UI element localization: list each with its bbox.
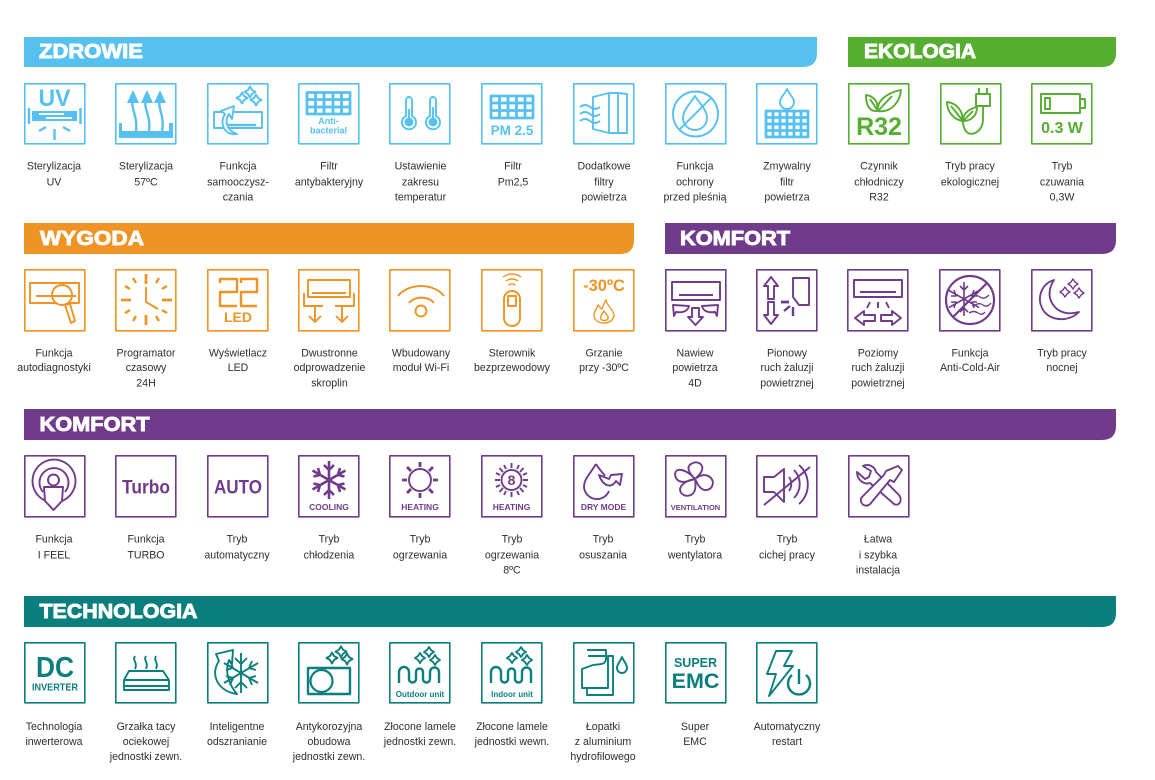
- item: Ochrona przed plesnia: [663, 84, 727, 204]
- label: moduł Wi-Fi: [393, 362, 449, 374]
- item: Czuwanie: [1032, 84, 1092, 204]
- label: filtry: [594, 176, 614, 188]
- heading: EKOLOGIA: [848, 37, 1116, 67]
- icon: Outdoor unit: Outdoor unit: [396, 690, 445, 699]
- label: Sterownik: [489, 348, 536, 360]
- item: Pionowy ruch: [757, 270, 817, 390]
- label: jednostki wewn.: [474, 736, 549, 748]
- item: Anti-Cold-Air: [940, 270, 1000, 374]
- item: Tryb ekologiczny: [941, 84, 1001, 188]
- item: Lopatki: [570, 643, 636, 763]
- label: Tryb: [227, 534, 248, 546]
- label: Tryb: [502, 534, 523, 546]
- label: Tryb pracy: [945, 160, 996, 172]
- label: bezprzewodowy: [474, 362, 551, 374]
- label: osuszania: [579, 550, 627, 562]
- icon: VENTILATION fan: VENTILATION: [671, 503, 720, 512]
- label: chłodniczy: [854, 176, 904, 188]
- label: Wbudowany: [392, 348, 451, 360]
- label: czasowy: [126, 362, 167, 374]
- icon: remote: [482, 270, 542, 331]
- label: Funkcja: [676, 160, 714, 172]
- icon: eco plug: [941, 84, 1001, 144]
- icon: diagnostics: [25, 270, 85, 331]
- label: Tryb: [319, 534, 340, 546]
- heading: TECHNOLOGIA: TECHNOLOGIA: [40, 601, 198, 623]
- label: z aluminium: [575, 736, 631, 748]
- label: Ustawienie: [395, 160, 447, 172]
- label: instalacja: [856, 564, 900, 576]
- label: Funkcja: [35, 534, 73, 546]
- label: Programator: [117, 348, 176, 360]
- icon: HEATING: HEATING: [401, 502, 439, 512]
- icon: smart defrost: [208, 643, 268, 703]
- label: EMC: [683, 736, 707, 748]
- icon: Turbo: Turbo: [122, 476, 170, 498]
- label: Zmywalny: [763, 160, 812, 172]
- label: Sterylizacja: [119, 160, 173, 172]
- icon: LED 22: LED: [224, 309, 252, 325]
- label: chłodzenia: [304, 550, 354, 562]
- label: Tryb: [777, 534, 798, 546]
- section: KOMFORT wide: [24, 409, 1116, 576]
- item: Filtr antybakteryjny: [295, 84, 364, 188]
- label: ruch żaluzji: [852, 362, 904, 374]
- label: I FEEL: [38, 550, 70, 562]
- icon: self cleaning: [208, 84, 268, 144]
- label: Złocone lamele: [384, 721, 456, 733]
- label: Funkcja: [951, 348, 989, 360]
- label: jednostki zewn.: [292, 751, 365, 763]
- label: UV: [47, 176, 62, 188]
- label: automatyczny: [204, 550, 270, 562]
- section: TECHNOLOGIA: [24, 596, 1116, 763]
- label: i szybka: [859, 550, 897, 562]
- item: Samooczyszczanie: [207, 84, 269, 204]
- label: przy -30ºC: [579, 362, 629, 374]
- icon: DRY MODE: DRY MODE: [581, 502, 626, 512]
- icon: UV: UV: [38, 85, 70, 112]
- icon: R32 leaves: R32: [856, 113, 902, 141]
- icon: wifi: [390, 270, 450, 331]
- heading: KOMFORT: [24, 409, 1116, 440]
- label: powietrznej: [851, 378, 905, 390]
- icon: vertical louver: [757, 270, 817, 331]
- label: Sterylizacja: [27, 160, 81, 172]
- icon: HEATING 8: [482, 456, 542, 517]
- label: Wyświetlacz: [209, 348, 267, 360]
- label: Złocone lamele: [476, 721, 548, 733]
- icon: DC INVERTER: [25, 643, 85, 703]
- item: LED: [208, 270, 268, 374]
- item: R32: [849, 84, 909, 204]
- label: 0,3W: [1050, 192, 1074, 204]
- label: przed pleśnią: [663, 192, 727, 204]
- item: Ustawienie zakresu temperatur: [390, 84, 450, 204]
- icon: Indoor unit: Indoor unit: [491, 690, 533, 699]
- icon: condensate drain: [299, 270, 359, 331]
- label: inwerterowa: [25, 736, 83, 748]
- label: Dwustronne: [301, 348, 358, 360]
- item: Cicha praca: [757, 456, 817, 562]
- label: jednostki zewn.: [109, 751, 182, 763]
- icon: I FEEL: [25, 456, 85, 517]
- label: cichej pracy: [759, 550, 816, 562]
- item: Wentylator: [666, 456, 726, 562]
- label: hydrofilowego: [570, 751, 636, 763]
- icon: anti-corrosion casing: [299, 643, 359, 703]
- icon: wrench and screwdriver: [849, 456, 909, 517]
- label: R32: [869, 192, 889, 204]
- item: Wi-Fi: [390, 270, 451, 374]
- icon: battery 0.3 W: 0.3 W: [1041, 120, 1084, 137]
- label: ruch żaluzji: [760, 362, 814, 374]
- label: Czynnik: [860, 160, 899, 172]
- label: ochrony: [676, 176, 715, 188]
- label: Dodatkowe: [578, 160, 631, 172]
- label: jednostki zewn.: [383, 736, 456, 748]
- icon: AUTO: AUTO: [214, 476, 262, 498]
- label: Technologia: [26, 721, 82, 733]
- label: powietrza: [672, 362, 718, 374]
- icon: horizontal louver: [848, 270, 908, 331]
- heading: WYGODA: [24, 223, 634, 254]
- icon: -30C flame: -30ºC: [583, 277, 625, 295]
- item: Auto: [204, 456, 270, 562]
- item: Sterylizacja UV: [25, 84, 85, 188]
- item: Odszranianie: [207, 643, 268, 748]
- item: Nawiew 4D: [666, 270, 726, 390]
- heading: KOMFORT: KOMFORT: [40, 414, 150, 436]
- label: ogrzewania: [393, 550, 447, 562]
- label: restart: [772, 736, 802, 748]
- item: Zlocone lamele wewn: [474, 643, 549, 748]
- heading: ZDROWIE: [24, 37, 817, 67]
- icon: anti-mould: [666, 84, 726, 144]
- label: Grzałka tacy: [117, 721, 176, 733]
- item: Grzalka tacy: [109, 643, 182, 763]
- label: Funkcja: [35, 348, 73, 360]
- icon: antibacterial filter: bacterial: [310, 126, 347, 136]
- label: Funkcja: [127, 534, 165, 546]
- item: Filtr Pm2,5: [482, 84, 542, 188]
- icon: moon: [1032, 270, 1092, 331]
- label: nocnej: [1046, 362, 1078, 374]
- item: Antykorozyjna: [292, 643, 365, 763]
- item: Auto restart: [754, 643, 821, 748]
- item: Dodatkowe filtry: [574, 84, 634, 204]
- label: powietrznej: [760, 378, 814, 390]
- label: Automatyczny: [754, 721, 821, 733]
- icon: HEATING 8: HEATING: [493, 502, 531, 512]
- label: Filtr: [504, 160, 522, 172]
- item: Ogrzewanie 8C: [482, 456, 542, 576]
- label: Tryb: [410, 534, 431, 546]
- label: ogrzewania: [485, 550, 539, 562]
- icon: anti cold air: [940, 270, 1000, 331]
- label: obudowa: [307, 736, 351, 748]
- section: KOMFORT right: [665, 223, 1116, 390]
- section: ZDROWIE: [24, 37, 817, 204]
- item: Sterylizacja 57: [116, 84, 176, 188]
- item: Chlodzenie: [299, 456, 359, 562]
- icon: thermometers: [390, 84, 450, 144]
- label: odprowadzenie: [294, 362, 366, 374]
- icon: 4D airflow: [666, 270, 726, 331]
- label: Tryb pracy: [1037, 348, 1088, 360]
- label: ociekowej: [123, 736, 169, 748]
- item: Zlocone lamele zewn: [383, 643, 456, 748]
- heading: ZDROWIE: ZDROWIE: [39, 41, 143, 63]
- label: 57ºC: [134, 176, 158, 188]
- heading: EKOLOGIA: EKOLOGIA: [864, 41, 976, 63]
- item: Grzanie -30: [574, 270, 634, 374]
- label: powietrza: [764, 192, 810, 204]
- label: Inteligentne: [210, 721, 264, 733]
- label: Funkcja: [219, 160, 257, 172]
- label: Filtr: [320, 160, 338, 172]
- section: WYGODA: [17, 223, 634, 390]
- item: Autodiagnostyka: [17, 270, 91, 374]
- label: Łatwa: [864, 534, 892, 546]
- item: Programator: [116, 270, 176, 390]
- label: Łopatki: [586, 721, 620, 733]
- label: Grzanie: [585, 348, 623, 360]
- icon: tray heater: [116, 643, 176, 703]
- label: Nawiew: [676, 348, 714, 360]
- label: samooczysz-: [207, 176, 269, 188]
- label: Pionowy: [767, 348, 808, 360]
- item: Inwerter: [25, 643, 85, 748]
- label: Tryb: [1052, 160, 1073, 172]
- heading: KOMFORT: [665, 223, 1116, 254]
- icon: washable filter: [757, 84, 817, 144]
- label: autodiagnostyki: [17, 362, 91, 374]
- icon: HEATING 8: 8: [508, 472, 516, 488]
- item: Ogrzewanie: [390, 456, 450, 562]
- icon: DC INVERTER: DC: [36, 652, 74, 684]
- icon: extra filters: [574, 84, 634, 144]
- label: Antykorozyjna: [296, 721, 362, 733]
- item: Dwustronne odprowadzenie: [294, 270, 366, 390]
- heading: KOMFORT: KOMFORT: [680, 228, 790, 250]
- item: Turbo: [116, 456, 176, 562]
- label: Pm2,5: [498, 176, 528, 188]
- label: TURBO: [127, 550, 165, 562]
- label: odszranianie: [207, 736, 267, 748]
- icon: auto restart: [757, 643, 817, 703]
- label: ekologicznej: [941, 176, 999, 188]
- label: Super: [681, 721, 710, 733]
- icon: DC INVERTER: INVERTER: [32, 682, 79, 694]
- item: Super EMC: [666, 643, 726, 748]
- label: zakresu: [402, 176, 439, 188]
- section: EKOLOGIA: [848, 37, 1116, 204]
- item: Sterownik: [474, 270, 551, 374]
- label: 8ºC: [503, 564, 521, 576]
- icon: antibacterial filter: [299, 84, 359, 144]
- item: Latwa instalacja: [849, 456, 909, 576]
- label: LED: [228, 362, 249, 374]
- item: Tryb nocny: [1032, 270, 1092, 374]
- item: Zmywalny filtr: [757, 84, 817, 204]
- icon: hydrophilic fins: [574, 643, 634, 703]
- icon: antibacterial filter: Anti-: [318, 116, 339, 126]
- icon: clock: [116, 270, 176, 331]
- label: filtr: [780, 176, 795, 188]
- icon: SUPER EMC: SUPER: [674, 656, 717, 670]
- heading: WYGODA: WYGODA: [40, 228, 144, 250]
- label: Tryb: [685, 534, 706, 546]
- item: Osuszanie: [574, 456, 634, 562]
- icon: SUPER EMC: EMC: [672, 669, 719, 693]
- icon: PM 2.5: PM 2.5: [491, 123, 534, 138]
- label: Poziomy: [858, 348, 899, 360]
- heading: TECHNOLOGIA: [24, 596, 1116, 627]
- label: wentylatora: [667, 550, 722, 562]
- icon: quiet speaker: [757, 456, 817, 517]
- label: powietrza: [581, 192, 627, 204]
- label: 24H: [136, 378, 156, 390]
- icon: SUPER EMC: [666, 643, 726, 703]
- label: czuwania: [1040, 176, 1084, 188]
- label: Anti-Cold-Air: [940, 362, 1000, 374]
- label: antybakteryjny: [295, 176, 364, 188]
- item: I FEEL: [25, 456, 85, 562]
- icon: heat arrows: [116, 84, 176, 144]
- label: Tryb: [593, 534, 614, 546]
- item: Poziomy ruch: [848, 270, 908, 390]
- label: temperatur: [395, 192, 447, 204]
- label: czania: [223, 192, 253, 204]
- label: skroplin: [311, 378, 348, 390]
- label: 4D: [688, 378, 702, 390]
- icon: COOLING: COOLING: [309, 502, 349, 512]
